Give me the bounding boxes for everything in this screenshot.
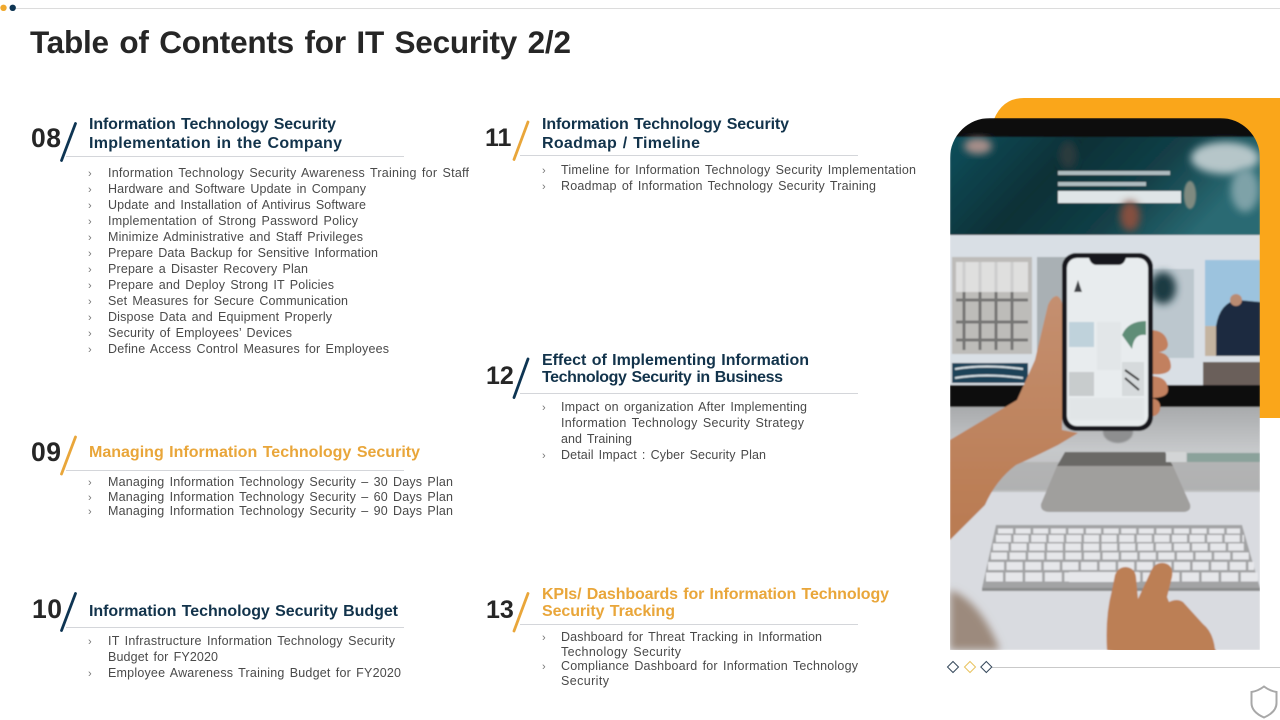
section 11 list: › [542,165,546,177]
section 10 [32,594,404,680]
icon: shield [1252,686,1276,718]
section 09 list: › [88,477,92,489]
section 13 [486,586,889,688]
photo: hand holding phone in front of monitor [950,118,1260,670]
section 12 list: › [542,450,546,462]
section 09 list [88,475,453,518]
section 10 number: 10 [32,594,62,624]
decorative diamonds with rule [948,662,1280,672]
monitor stand [994,430,1260,512]
section 08 list [88,166,470,356]
section 13 list: › [542,661,546,673]
section 08 list: Prepare Data Backup for Sensitive Information [108,246,378,260]
section 08 [31,116,470,356]
section 08 list: Implementation of Strong Password Policy [108,214,359,228]
section 08 list: Prepare a Disaster Recovery Plan [108,262,308,276]
section 08 list: › [88,232,92,244]
section 10 heading: Information Technology Security Budget [89,603,399,620]
section 13 number: 13 [486,596,514,624]
blurred shoulder shadow [950,590,1000,650]
section 09 heading: Managing Information Technology Security [89,444,420,461]
section 09 list: Managing Information Technology Security – 60 Days Plan [108,490,453,504]
section 08 heading [89,116,342,152]
section 12 slash [514,359,528,398]
section 08 list: Information Technology Security Awareness Training for Staff [108,166,470,180]
section 08 list: › [88,168,92,180]
section 12 list: › [542,402,546,414]
section 08 list: › [88,328,92,340]
section 12 [486,352,858,462]
section 10 list: › [88,636,92,648]
section 13 list: › [542,632,546,644]
section 08 list: › [88,248,92,260]
section 09 slash [62,437,76,474]
section 12 heading: Technology Security in Business [542,369,783,386]
section 13 list: Security [561,674,610,688]
website hero banner [950,137,1260,235]
section 08 list: › [88,200,92,212]
section 12 heading: Effect of Implementing Information [542,352,809,369]
section 11 slash [514,122,528,160]
section 08 list: › [88,344,92,356]
arm and hand holding phone [950,296,1078,540]
title: Table of Contents for IT Security 2/2 [30,24,571,60]
section 08 list: Set Measures for Secure Communication [108,294,348,308]
section 12 heading [542,352,809,386]
section 11 [485,116,916,193]
section 09 list: › [88,492,92,504]
section 13 heading: KPIs/ Dashboards for Information Technology [542,586,889,603]
section 09 [31,437,453,518]
section 11 list [542,163,916,193]
section 11 number: 11 [485,124,512,152]
section 11 list: Roadmap of Information Technology Security Training [561,179,876,193]
phone [1062,253,1153,431]
section 13 list [542,630,859,688]
monitor lower bezel [950,385,1260,408]
section 09 list: › [88,506,92,518]
section 11 heading: Information Technology Security [542,116,789,133]
section 08 list: Hardware and Software Update in Company [108,182,367,196]
section 08 list: Update and Installation of Antivirus Software [108,198,366,212]
section 13 slash [514,594,528,631]
section 08 list: › [88,184,92,196]
section 08 list: › [88,312,92,324]
section 13 list: Dashboard for Threat Tracking in Information [561,630,822,644]
section 08 heading: Information Technology Security [89,116,336,133]
section 09 number: 09 [31,437,61,467]
section 10 list: › [88,668,92,680]
orange backdrop panel [992,98,1280,418]
section 08 list: Prepare and Deploy Strong IT Policies [108,278,334,292]
section 09 list: Managing Information Technology Security – 30 Days Plan [108,475,453,489]
section 10 slash [62,594,76,630]
section 08 list: › [88,216,92,228]
section 10 list: Employee Awareness Training Budget for FY2020 [108,666,401,680]
section 11 list: › [542,181,546,193]
section 08 number: 08 [31,123,61,153]
website gallery [950,235,1260,386]
section 11 heading [542,116,789,152]
section 12 number: 12 [486,362,514,390]
section 12 list [542,400,807,462]
section 11 heading: Roadmap / Timeline [542,135,700,152]
top rule with dots [0,5,1280,11]
section 08 heading: Implementation in the Company [89,135,342,152]
section 08 list: Dispose Data and Equipment Properly [108,310,333,324]
section 13 heading: Security Tracking [542,603,675,620]
section 08 list: › [88,264,92,276]
monitor chin [950,407,1260,492]
desk [950,492,1260,650]
section 08 list: Define Access Control Measures for Employees [108,342,389,356]
section 08 list: › [88,280,92,292]
section 08 list: Security of Employees’ Devices [108,326,292,340]
keyboard [982,525,1260,591]
section 12 list: Detail Impact : Cyber Security Plan [561,448,766,462]
section 08 slash [62,124,76,160]
section 11 list: Timeline for Information Technology Security Implementation [561,163,916,177]
hand pressing keyboard [1106,562,1217,650]
section 08 list: › [88,296,92,308]
section 12 list: and Training [561,432,632,446]
section 13 heading [542,586,889,620]
section 10 list: IT Infrastructure Information Technology Security [108,634,396,648]
section 09 list: Managing Information Technology Security – 90 Days Plan [108,504,453,518]
section 13 list: Compliance Dashboard for Information Technology [561,659,859,673]
section 12 list: Impact on organization After Implementing [561,400,807,414]
section 10 list [88,634,401,680]
section 10 list: Budget for FY2020 [108,650,218,664]
section 13 list: Technology Security [561,645,682,659]
section 08 list: Minimize Administrative and Staff Privileges [108,230,363,244]
section 12 list: Information Technology Security Strategy [561,416,805,430]
monitor bezel [950,118,1260,138]
